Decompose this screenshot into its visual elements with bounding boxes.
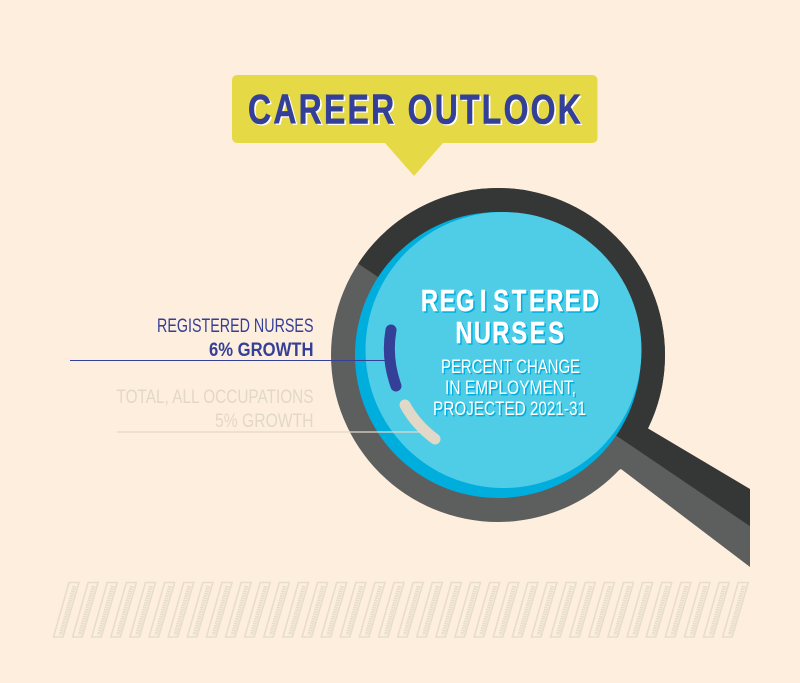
- title callout: [232, 75, 598, 176]
- lens subheading: PERCENT CHANGE: [442, 358, 582, 380]
- lens heading: NURSES: [457, 317, 565, 351]
- arc: total occupations 5%: [405, 405, 435, 439]
- leader line: total occupations: [117, 431, 422, 433]
- lens heading: NURSES: [455, 315, 564, 350]
- handle and rim: upper dark half: [358, 188, 750, 526]
- leader line: registered nurses: [70, 360, 386, 362]
- lens heading: REGISTERED: [421, 283, 599, 318]
- magnifying glass: [331, 188, 750, 567]
- lens subheading: IN EMPLOYMENT,: [446, 378, 578, 400]
- handle and rim: lower grey half: [331, 188, 750, 567]
- lens subheading: PERCENT CHANGE: [441, 356, 580, 378]
- title: CAREER OUTLOOK: [248, 85, 583, 133]
- label: registered nurses: 6% GROWTH: [209, 340, 314, 361]
- title: CAREER OUTLOOK: [250, 87, 585, 134]
- label: total occupations: 5% GROWTH: [215, 411, 314, 432]
- lens heading: [421, 283, 601, 351]
- arc: registered nurses 6%: [389, 330, 396, 386]
- label: total occupations: [116, 387, 314, 432]
- infographic: [52, 75, 750, 638]
- lens outer blue: [355, 212, 641, 498]
- callout bubble: [232, 75, 598, 176]
- lens subheading: PROJECTED 2021-31: [434, 400, 588, 422]
- lens subheading: IN EMPLOYMENT,: [445, 377, 576, 399]
- lens heading: REGISTERED: [422, 285, 601, 319]
- lens subheading: PROJECTED 2021-31: [433, 398, 586, 420]
- label: total occupations: TOTAL, ALL OCCUPATIONS: [116, 387, 314, 408]
- label: registered nurses: REGISTERED NURSES: [157, 316, 314, 337]
- decorative striped ground: [54, 582, 748, 637]
- lens subheading: [433, 356, 588, 422]
- lens inner cyan: [366, 212, 642, 488]
- label: registered nurses: [157, 316, 314, 361]
